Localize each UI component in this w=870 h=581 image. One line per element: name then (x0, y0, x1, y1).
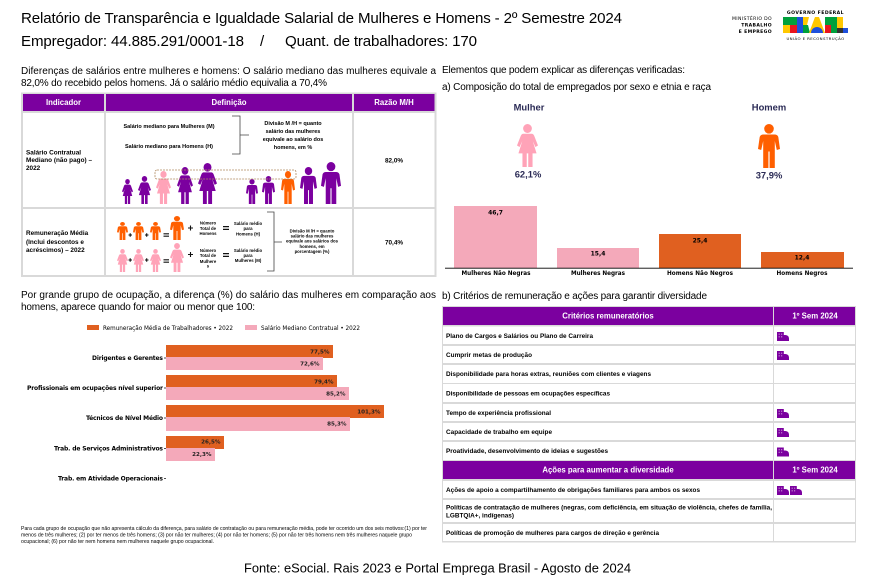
definição: média mulheres: para (243, 253, 253, 258)
bars: profissionais: 85,2% (326, 392, 346, 398)
bars: serviços administrativos (54, 436, 224, 461)
bars: profissionais: 79,4% (314, 380, 334, 386)
table header: Definição (211, 98, 247, 107)
bar: homens negros (761, 252, 844, 277)
bar chart: composição (445, 206, 853, 277)
header: ações para diversidade: Ações para aumentar a diversidade (542, 466, 674, 474)
row: ocupações específicas: Disponibilidade de pessoas em ocupações específicas (446, 390, 610, 398)
bar: homens negros: Homens Negros (776, 271, 828, 277)
row label: remuneração média (26, 230, 89, 254)
bars: serviços administrativos: 26,5% (201, 440, 221, 446)
header: ações para diversidade (542, 466, 838, 474)
bars: profissionais (27, 375, 349, 400)
logo: governo federal brasil: GOVERNO FEDERAL (787, 10, 844, 16)
bars: dirigentes e gerentes: 72,6% (300, 362, 320, 368)
definição: divisão M/H: equivale aos salários dos (286, 239, 339, 244)
bars: serviços administrativos: Trab. de Serviços Administrativos (54, 446, 163, 452)
definição: divisão M/H: salário das mulheres (291, 234, 334, 238)
bar: mulheres negras (557, 248, 639, 277)
bars: dirigentes e gerentes: 77,5% (310, 350, 330, 356)
definição: média homens: para (243, 226, 253, 231)
bars: técnicos: Técnicos de Nível Médio (86, 415, 163, 422)
row: capacidade de trabalho (446, 428, 789, 437)
composição: homem: Homem (752, 102, 786, 112)
header: critérios remuneratórios (562, 312, 838, 320)
definição: média homens: Homens (H) (236, 232, 261, 236)
bar: mulheres negras: Mulheres Negras (571, 271, 626, 277)
bar: mulheres não negras: Mulheres Não Negras (462, 271, 531, 277)
bars: dirigentes e gerentes: Dirigentes e Gerentes (92, 355, 163, 362)
definição: salário mediano: salário das mulheres (266, 129, 320, 135)
definição: média homens: Salário médio (234, 221, 262, 226)
table header: Razão M/H (374, 98, 414, 107)
row: apoio obrigações familiares (446, 486, 802, 495)
bar: homens negros: 12,4 (795, 254, 809, 262)
row label: salário contratual: Mediano (não pago) – (26, 157, 92, 164)
definição: média homens (117, 216, 262, 240)
row: plano de cargos (446, 332, 789, 341)
bars: atividade operacionais: Trab. em Atividade Operacionais (58, 476, 163, 482)
fonte: Fonte: eSocial. Rais 2023 e Portal Emprega Brasil - Agosto de 2024 (244, 560, 631, 576)
logo: ministério: E EMPREGO (739, 29, 772, 35)
row: políticas de promoção: Políticas de promoção de mulheres para cargos de direção e gerência (446, 530, 659, 537)
legend: bar chart (87, 325, 360, 332)
row: tempo de experiência (446, 409, 789, 418)
logo: ministério: MINISTÉRIO DO (732, 14, 772, 22)
row: horas extras: Disponibilidade para horas extras, reuniões com clientes e viagens (446, 371, 651, 378)
logo: ministério (732, 14, 772, 35)
bar chart: ocupações (27, 345, 384, 482)
definição: salário mediano: Salário mediano para Homens (H) (125, 144, 213, 150)
row label: salário contratual: Salário Contratual (26, 150, 81, 156)
bar: mulheres não negras: 46,7 (488, 210, 503, 216)
text block: diferenças de salários: Diferenças de salários entre mulheres e homens: O salário mediano das mulheres equivale a (21, 66, 436, 77)
title (21, 10, 622, 50)
composição: mulher (514, 102, 545, 180)
text block: diferenças de salários: 82,0% do recebido pelos homens. Já o salário médio equivalia a 70,4% (21, 78, 327, 89)
bars: dirigentes e gerentes (92, 345, 333, 370)
title: Relatório de Transparência e Igualdade Salarial de Mulheres e Homens - 2º Semestre 2024 (21, 10, 622, 27)
title: Quant. de trabalhadores: 170 (285, 33, 477, 50)
nota de rodapé: ocupacional; (6) por não ter nem homens nem mulheres naquele grupo ocupacional. (21, 539, 214, 545)
row: apoio obrigações familiares: Ações de apoio a compartilhamento de obrigações familiares para ambos os sexos (446, 487, 700, 494)
definição: salário mediano: homens, em % (274, 145, 312, 151)
title: / (260, 33, 265, 50)
row: tempo de experiência: Tempo de experiência profissional (446, 410, 551, 417)
composição: homem (752, 102, 786, 180)
bars: técnicos: 101,3% (357, 410, 381, 416)
panel: tabela indicadores (21, 92, 436, 277)
definição: divisão M/H: porcentagem (%) (295, 249, 330, 254)
row: plano de cargos: Plano de Cargos e Salários ou Plano de Carreira (446, 333, 593, 340)
row label: remuneração média: acréscimos) – 2022 (26, 247, 85, 254)
header: critérios remuneratórios: 1º Sem 2024 (792, 312, 838, 320)
icon: fileira de mulheres e homens (122, 162, 341, 204)
nota de rodapé: menos de três mulheres; (2) por ter menos de três homens; (3) por não ter mulheres; (4) por não ter homens; (5) por não ter três homens nem três mulheres naquele grupo (21, 532, 412, 538)
definição: salário mediano (123, 116, 323, 154)
definição: média mulheres: Número (200, 248, 216, 253)
panel: tabela de critérios (442, 306, 856, 542)
definição: média mulheres: Total de (200, 253, 217, 258)
row label: remuneração média: (Inclui descontos e (26, 239, 84, 246)
valor: 70,4%: 70,4% (385, 240, 403, 246)
logo: ministério: TRABALHO (741, 22, 772, 28)
composição: mulher: Mulher (514, 102, 545, 112)
legend: bar chart: Salário Mediano Contratual • 2022 (261, 325, 360, 332)
definição: salário mediano: equivale ao salário dos (263, 137, 323, 143)
row: cumprir metas (446, 351, 789, 360)
text block: grande grupo de ocupação: homens, aparece quando for maior ou menor que 100: (21, 302, 255, 313)
definição: salário mediano: Salário mediano para Mulheres (M) (123, 124, 215, 130)
bar: mulheres negras: 15,4 (591, 250, 605, 258)
definição: média homens: Total de (200, 226, 217, 231)
bars: técnicos: 85,3% (327, 422, 347, 428)
header: critérios remuneratórios: Critérios remuneratórios (562, 312, 654, 320)
definição: média mulheres (117, 243, 262, 272)
logo: governo federal brasil (783, 10, 848, 41)
bar: homens não negros: Homens Não Negros (667, 271, 734, 277)
legend: bar chart: Remuneração Média de Trabalhadores • 2022 (103, 325, 233, 332)
bar: homens não negros: 25,4 (693, 238, 707, 244)
table header (23, 94, 434, 111)
definição: média homens: Número (200, 220, 216, 226)
row label: salário contratual: 2022 (26, 165, 41, 172)
definição: divisão M/H: homens, em (299, 244, 325, 249)
heading: composição: a) Composição do total de empregados por sexo e etnia e raça (442, 82, 711, 93)
heading: elementos: Elementos que podem explicar as diferenças verificadas: (442, 65, 685, 76)
row: proatividade (446, 448, 789, 456)
nota de rodapé (21, 526, 427, 545)
bars: profissionais: Profissionais em ocupações nível superior (27, 385, 163, 392)
row: proatividade: Proatividade, desenvolvimento de ideias e sugestões (446, 448, 608, 455)
row: capacidade de trabalho: Capacidade de trabalho em equipe (446, 429, 552, 436)
row: políticas de contratação (446, 504, 772, 520)
definição: divisão M/H: Divisão M /H = quanto (290, 228, 335, 234)
bar: mulheres não negras (454, 206, 537, 277)
text block: diferenças de salários (21, 66, 436, 89)
table header: Indicador (46, 98, 81, 107)
row: políticas de contratação: Políticas de contratação de mulheres (negras, com deficiência, em situação de violência, chefes de família, (446, 504, 772, 512)
row label: remuneração média: Remuneração Média (26, 230, 89, 237)
bars: serviços administrativos: 22,3% (192, 452, 212, 458)
definição: média homens: Homens (200, 231, 217, 236)
title: Empregador: 44.885.291/0001-18 (21, 33, 244, 50)
row: políticas de contratação: LGBTQIA+, indígenas) (446, 512, 514, 520)
text block: grande grupo de ocupação: Por grande grupo de ocupação, a diferença (%) do salário das mulheres em comparação aos (21, 290, 436, 301)
heading: critérios: b) Critérios de remuneração e ações para garantir diversidade (442, 291, 707, 302)
bar: homens não negros (659, 234, 741, 277)
composição: homem: 37,9% (756, 170, 783, 180)
valor: 82,0%: 82,0% (385, 158, 403, 164)
composição: mulher: 62,1% (515, 168, 542, 180)
definição: salário mediano: Divisão M /H = quanto (264, 121, 322, 127)
definição: divisão M/H (267, 212, 339, 271)
bars: técnicos (86, 405, 384, 431)
definição: média mulheres: Salário médio (234, 248, 262, 253)
definição: média mulheres: Mulhere (200, 259, 217, 264)
definição: média mulheres: s (207, 264, 210, 268)
header: ações para diversidade: 1º Sem 2024 (792, 466, 838, 474)
row: cumprir metas: Cumprir metas de produção (446, 352, 532, 359)
nota de rodapé: Para cada grupo de ocupação que não apresenta cálculo da diferença, para salário de contratação ou para remuneração média, pode ter ocorrido um dos seis motivos:(1) por ter (21, 526, 427, 532)
row label: salário contratual (26, 150, 92, 172)
text block: grande grupo de ocupação (21, 290, 436, 313)
definição: média mulheres: Mulheres (M) (235, 258, 262, 263)
logo: governo federal brasil: UNIÃO E RECONSTRUÇÃO (786, 36, 845, 41)
